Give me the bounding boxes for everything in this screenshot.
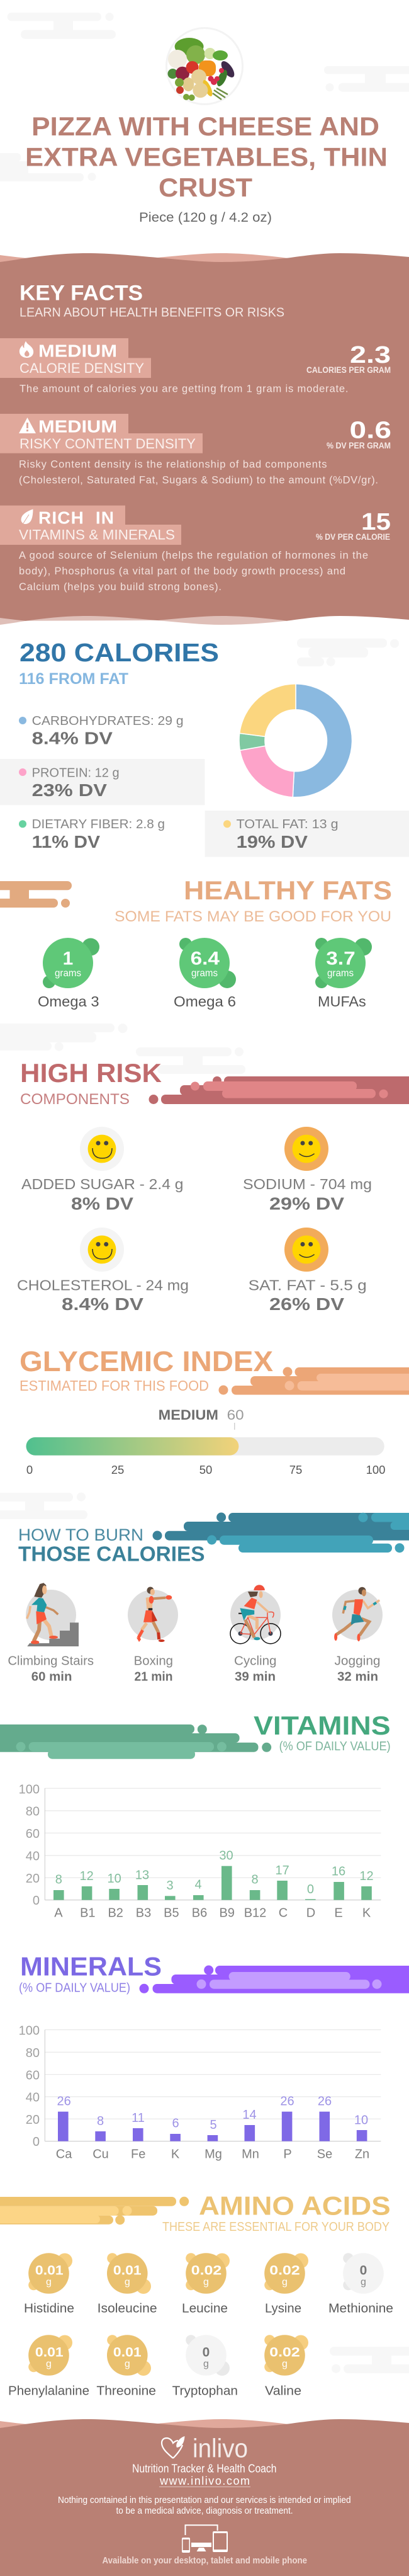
bar chart: minerals: Ca xyxy=(56,2148,72,2162)
heading: vitamins: VITAMINS xyxy=(254,1711,391,1740)
heading: amino acids: AMINO ACIDS xyxy=(199,2191,391,2221)
bar chart: minerals: Mn xyxy=(242,2148,259,2162)
panel: key facts xyxy=(0,253,409,625)
bar chart: minerals: P xyxy=(283,2148,292,2162)
bar chart: minerals: Mg xyxy=(204,2148,222,2162)
icon: devices xyxy=(182,2525,228,2553)
card: risky content density: RISKY CONTENT DENSITY xyxy=(20,436,196,452)
activity: jogging: 32 min xyxy=(337,1670,378,1684)
logo: inlivo: inlivo xyxy=(193,2434,248,2463)
legend: total fat xyxy=(205,811,409,857)
legend: protein xyxy=(0,759,205,805)
panel: calories xyxy=(0,638,409,857)
title: PIZZA WITH CHEESE AND xyxy=(31,111,379,141)
serving size: Piece (120 g / 4.2 oz) xyxy=(139,210,272,225)
legend: carbohydrates xyxy=(19,714,184,748)
item: saturated fat: 26% DV xyxy=(269,1294,344,1314)
bar chart: vitamins: 0 xyxy=(307,1883,314,1896)
bar chart: minerals: 11 xyxy=(132,2111,145,2125)
badge: mufas: grams xyxy=(327,968,354,979)
bar chart: minerals: 14 xyxy=(242,2108,257,2122)
heading: 280 calories: 280 CALORIES xyxy=(20,638,219,667)
badge: tryptophan xyxy=(172,2335,238,2398)
bar chart: vitamins: B1 xyxy=(80,1906,96,1920)
stat: calories per gram: 2.3 xyxy=(350,342,391,368)
item: cholesterol: 8.4% DV xyxy=(62,1294,143,1314)
activity: boxing: 21 min xyxy=(135,1670,172,1684)
stat: dv per calorie xyxy=(316,509,391,542)
icon: leaf xyxy=(21,509,33,524)
bar chart: vitamins xyxy=(19,1782,381,1920)
badge: tryptophan: 0 xyxy=(203,2345,210,2360)
subheading: key facts: LEARN ABOUT HEALTH BENEFITS OR RISKS xyxy=(20,306,284,320)
subheading: glycemic index: ESTIMATED FOR THIS FOOD xyxy=(20,1377,209,1394)
badge: threonine: Threonine xyxy=(96,2384,156,2398)
badge: isoleucine xyxy=(98,2253,157,2316)
badge: leucine: 0.02 xyxy=(191,2264,221,2278)
card: calorie density: MEDIUM xyxy=(38,341,117,360)
bar chart: vitamins: 13 xyxy=(135,1868,149,1882)
bar chart: minerals: Zn xyxy=(355,2148,369,2162)
badge: methionine xyxy=(328,2253,393,2316)
value: medium 60 xyxy=(159,1407,244,1430)
stat: dv per gram xyxy=(327,417,391,450)
badge: valine: 0.02 xyxy=(269,2345,300,2360)
badge: omega 6: 6.4 xyxy=(191,949,220,969)
card: risky content density: MEDIUM xyxy=(38,416,117,436)
heading: healthy fats: HEALTHY FATS xyxy=(184,875,392,905)
badge: omega 3: Omega 3 xyxy=(38,993,99,1010)
bar chart: vitamins: B6 xyxy=(192,1906,207,1920)
badge: phenylalanine: 0.01 xyxy=(35,2345,64,2360)
gauge scale labels: 50 xyxy=(199,1463,212,1476)
badge: lysine: g xyxy=(282,2277,288,2288)
heading: high risk: HIGH RISK xyxy=(20,1058,162,1088)
bar chart: vitamins: 3 xyxy=(166,1879,174,1893)
legend: carbohydrates: 8.4% DV xyxy=(32,729,113,748)
donut chart xyxy=(239,684,352,797)
bar chart: vitamins: D xyxy=(306,1906,315,1920)
badge: valine xyxy=(264,2335,308,2398)
badge: threonine xyxy=(96,2335,156,2398)
legend: total fat: TOTAL FAT: 13 g xyxy=(237,818,339,831)
bar chart: vitamins: 80 xyxy=(26,1805,40,1819)
legend: total fat: 19% DV xyxy=(237,832,308,852)
badge: omega 6: grams xyxy=(191,968,218,979)
bar chart: vitamins: K xyxy=(362,1906,371,1920)
badge: valine: Valine xyxy=(265,2384,301,2398)
badge: histidine: 0.01 xyxy=(35,2264,64,2278)
subheading: amino acids: THESE ARE ESSENTIAL FOR YOUR BODY xyxy=(162,2220,389,2234)
bar chart: minerals: 5 xyxy=(210,2118,217,2132)
stat: dv per gram: 0.6 xyxy=(350,417,391,443)
badge: leucine: Leucine xyxy=(182,2302,228,2316)
stat: dv per calorie: % DV PER CALORIE xyxy=(316,532,390,542)
badge: leucine: g xyxy=(203,2277,209,2288)
subheading: daily value: (% OF DAILY VALUE) xyxy=(19,1981,130,1995)
badge: leucine xyxy=(182,2253,230,2316)
title: EXTRA VEGETABLES, THIN xyxy=(25,142,388,171)
subheading: healthy fats: SOME FATS MAY BE GOOD FOR YOU xyxy=(115,908,391,925)
bar chart: vitamins: 17 xyxy=(275,1864,289,1878)
badge: omega 3: 1 xyxy=(63,949,73,969)
bar chart: vitamins: 20 xyxy=(26,1872,40,1886)
panel: healthy fats xyxy=(0,875,392,1010)
food photo: vegetables xyxy=(166,28,243,105)
panel: high risk components xyxy=(17,1058,409,1314)
subheading: from fat: 116 FROM FAT xyxy=(19,670,128,688)
bar chart: vitamins: 4 xyxy=(194,1878,202,1892)
item: added sugar: ADDED SUGAR - 2.4 g xyxy=(21,1176,184,1192)
bar chart: vitamins: 8 xyxy=(251,1873,259,1887)
heading: key facts: KEY FACTS xyxy=(20,281,143,305)
item: saturated fat xyxy=(249,1228,367,1314)
badge: lysine: Lysine xyxy=(265,2302,301,2316)
bar chart: vitamins: 40 xyxy=(26,1849,40,1863)
legend: protein: PROTEIN: 12 g xyxy=(32,766,120,780)
activity: climbing stairs: 60 min xyxy=(31,1670,72,1684)
bar chart: minerals: 80 xyxy=(26,2046,40,2060)
activity: boxing: Boxing xyxy=(134,1654,173,1668)
gauge scale labels xyxy=(26,1463,385,1476)
activity: boxing xyxy=(128,1587,178,1684)
bar chart: vitamins: A xyxy=(54,1906,63,1920)
badge: isoleucine: 0.01 xyxy=(113,2264,142,2278)
badge: phenylalanine: g xyxy=(46,2359,52,2369)
bar chart: vitamins: 8 xyxy=(55,1873,62,1887)
bar chart: vitamins: 10 xyxy=(107,1872,121,1886)
card: rich in vitamins and minerals: A good source of Selenium (helps the regulation of hormones in the xyxy=(19,550,368,561)
stat: dv per calorie: 15 xyxy=(361,509,391,535)
activity: jogging xyxy=(332,1587,383,1684)
badge: omega 3 xyxy=(38,938,99,1010)
bar chart: vitamins: 12 xyxy=(79,1869,94,1883)
card: calorie density: CALORIE DENSITY xyxy=(20,360,144,376)
bar chart: minerals: Cu xyxy=(92,2148,109,2162)
availability note: Available on your desktop, tablet and mobile phone xyxy=(102,2555,307,2566)
heading: how to burn: HOW TO BURN xyxy=(18,1525,143,1544)
activity: climbing stairs xyxy=(8,1583,94,1684)
panel: vitamins xyxy=(0,1711,391,1920)
gauge scale labels: 0 xyxy=(26,1463,33,1476)
bar chart: minerals: Fe xyxy=(131,2148,145,2162)
badge: omega 6: Omega 6 xyxy=(174,993,236,1010)
disclaimer: Nothing contained in this presentation and our services is intended or implied xyxy=(58,2495,351,2505)
bar chart: vitamins: B12 xyxy=(244,1906,266,1920)
panel: glycemic index xyxy=(20,1345,409,1476)
bar chart: vitamins: B3 xyxy=(136,1906,151,1920)
icon: flame xyxy=(20,341,33,358)
badge: threonine: g xyxy=(125,2359,130,2369)
card: risky content density xyxy=(0,414,391,486)
badge: methionine: 0 xyxy=(360,2264,367,2278)
title: CRUST xyxy=(159,173,252,202)
card: risky content density: (Cholesterol, Saturated Fat, Sugars & Sodium) to the amount (%DV/gr). xyxy=(19,474,378,486)
badge: valine: g xyxy=(282,2359,288,2369)
logo: inlivo xyxy=(162,2434,248,2463)
bar chart: minerals: 26 xyxy=(318,2095,332,2109)
card: rich in vitamins and minerals: body), Phosphorus (a vital part of the body growth process) and xyxy=(19,566,345,577)
bar chart: vitamins: 30 xyxy=(219,1849,233,1862)
bar chart: vitamins: B9 xyxy=(219,1906,235,1920)
badge: tryptophan: g xyxy=(203,2359,209,2369)
badge: methionine: Methionine xyxy=(328,2302,393,2316)
card: rich in vitamins and minerals: RICH IN xyxy=(38,508,114,527)
bar chart: minerals: 6 xyxy=(172,2117,179,2131)
heading: minerals: MINERALS xyxy=(20,1952,162,1981)
badge: methionine: g xyxy=(361,2277,366,2288)
value: medium 60: MEDIUM xyxy=(159,1407,218,1423)
value: medium 60: 60 xyxy=(227,1407,244,1423)
disclaimer xyxy=(58,2495,351,2516)
item: sodium: SODIUM - 704 mg xyxy=(243,1176,372,1192)
item: cholesterol xyxy=(17,1228,189,1314)
badge: histidine xyxy=(24,2253,74,2316)
bar chart: minerals: 20 xyxy=(26,2113,40,2127)
heading: those calories: THOSE CALORIES xyxy=(18,1542,205,1565)
badge: tryptophan: Tryptophan xyxy=(172,2384,238,2398)
bar chart: vitamins: 0 xyxy=(33,1894,40,1908)
panel: footer xyxy=(0,2419,409,2576)
item: sodium: 29% DV xyxy=(269,1194,344,1214)
bar chart: minerals xyxy=(19,2024,381,2162)
gauge bar xyxy=(26,1437,384,1456)
title xyxy=(25,111,388,202)
bar chart: minerals: 8 xyxy=(97,2114,104,2128)
item: cholesterol: CHOLESTEROL - 24 mg xyxy=(17,1277,189,1293)
item: added sugar xyxy=(21,1127,184,1214)
badge: isoleucine: Isoleucine xyxy=(98,2302,157,2316)
bar chart: minerals: 0 xyxy=(33,2135,40,2149)
bar chart: vitamins: 60 xyxy=(26,1827,40,1841)
badge: phenylalanine: Phenylalanine xyxy=(8,2384,89,2398)
item: added sugar: 8% DV xyxy=(71,1194,133,1214)
gauge scale labels: 100 xyxy=(366,1463,385,1476)
legend: dietary fiber: 11% DV xyxy=(32,832,100,852)
bar chart: minerals: 60 xyxy=(26,2068,40,2082)
bar chart: vitamins: E xyxy=(334,1906,343,1920)
badge: mufas: 3.7 xyxy=(326,949,356,969)
badge: omega 6 xyxy=(174,938,236,1010)
bar chart: minerals: K xyxy=(171,2148,180,2162)
bar chart: minerals: Se xyxy=(317,2148,332,2162)
badge: histidine: Histidine xyxy=(24,2302,74,2316)
website link: www.inlivo.com xyxy=(159,2475,250,2487)
bar chart: minerals: 40 xyxy=(26,2091,40,2105)
disclaimer: to be a medical advice, diagnosis or treatment. xyxy=(116,2505,293,2516)
card: rich in vitamins and minerals: VITAMINS & MINERALS xyxy=(19,527,175,543)
card: rich in vitamins and minerals: Calcium (helps you build strong bones). xyxy=(19,581,221,593)
card: rich in vitamins and minerals xyxy=(0,506,391,593)
bar chart: minerals: 26 xyxy=(57,2095,71,2109)
gauge scale labels: 75 xyxy=(289,1463,302,1476)
legend: carbohydrates: CARBOHYDRATES: 29 g xyxy=(32,714,184,728)
card: calorie density xyxy=(0,338,391,395)
stat: calories per gram xyxy=(306,342,391,375)
item: sodium xyxy=(243,1127,372,1214)
subheading: daily value: (% OF DAILY VALUE) xyxy=(279,1740,391,1753)
bar chart: vitamins: 12 xyxy=(359,1869,374,1883)
gauge scale labels: 25 xyxy=(111,1463,124,1476)
badge: histidine: g xyxy=(46,2277,52,2288)
card: calorie density: The amount of calories you are getting from 1 gram is moderate. xyxy=(20,384,349,395)
tagline: Nutrition Tracker & Health Coach xyxy=(132,2463,277,2475)
badge: mufas: MUFAs xyxy=(318,993,366,1010)
bar chart: vitamins: 100 xyxy=(19,1782,40,1796)
stat: calories per gram: CALORIES PER GRAM xyxy=(306,365,391,375)
bar chart: minerals: 10 xyxy=(354,2113,368,2127)
activity: cycling xyxy=(230,1585,281,1684)
panel: how to burn those calories xyxy=(8,1513,409,1684)
badge: threonine: 0.01 xyxy=(113,2345,142,2360)
badge: omega 3: grams xyxy=(55,968,81,979)
legend: protein: 23% DV xyxy=(32,780,107,800)
badge: isoleucine: g xyxy=(125,2277,130,2288)
bar chart: minerals: 100 xyxy=(19,2024,40,2038)
heading: glycemic index: GLYCEMIC INDEX xyxy=(20,1345,273,1377)
activity: climbing stairs: Climbing Stairs xyxy=(8,1654,94,1668)
activity: cycling: Cycling xyxy=(234,1654,277,1668)
badge: lysine xyxy=(264,2253,308,2316)
subheading: components: COMPONENTS xyxy=(20,1091,130,1108)
icon: warning triangle xyxy=(19,418,36,433)
panel: minerals xyxy=(19,1952,409,2162)
badge: lysine: 0.02 xyxy=(269,2264,300,2278)
legend: dietary fiber: DIETARY FIBER: 2.8 g xyxy=(32,818,165,831)
activity: jogging: Jogging xyxy=(335,1654,380,1668)
bar chart: vitamins: B5 xyxy=(164,1906,179,1920)
legend: dietary fiber xyxy=(19,818,165,852)
activity: cycling: 39 min xyxy=(235,1670,276,1684)
stat: dv per gram: % DV PER GRAM xyxy=(327,441,391,450)
card: risky content density: Risky Content density is the relationship of bad components xyxy=(19,459,327,470)
bar chart: vitamins: B2 xyxy=(108,1906,123,1920)
badge: phenylalanine xyxy=(8,2335,89,2398)
bar chart: vitamins: C xyxy=(279,1906,288,1920)
item: saturated fat: SAT. FAT - 5.5 g xyxy=(249,1277,367,1293)
badge: mufas xyxy=(315,938,372,1010)
panel: amino acids xyxy=(0,2191,393,2398)
bar chart: vitamins: 16 xyxy=(332,1865,345,1879)
bar chart: minerals: 26 xyxy=(280,2095,294,2109)
